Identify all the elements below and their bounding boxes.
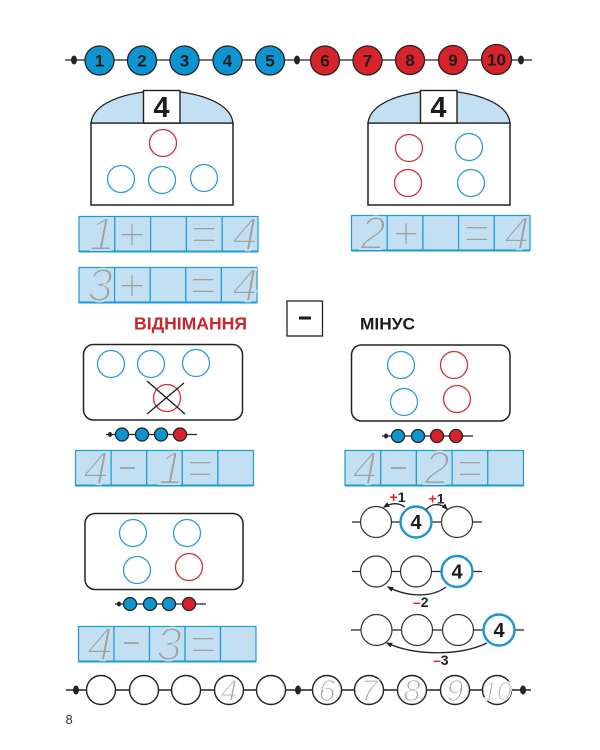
equation: 3 + = 4: 4 [232,259,258,311]
page number: 8 [66,712,73,727]
number line 1 to 10: 9 [448,51,458,70]
number line 1 to 10: 4 [223,52,233,70]
equation: 4 - 3 =: 3 [156,618,182,670]
panel: 2 blue, 2 red [352,345,510,421]
number diagram: 4 minus 3: –3 [433,652,449,668]
equation: 3 + = 4: = [190,259,216,311]
number line 1 to 10: 1 [95,52,104,70]
equation: 4 - 2 =: 2 [423,442,450,494]
bottom number line with traced digits: 7 [360,673,379,708]
equation: 2 + = 4: = [464,207,490,259]
equation: 2 + = 4: + [393,207,419,259]
equation: 2 + = 4: 2 [359,207,386,259]
panel: house with 1 red and 3 blue: 4 [153,92,170,124]
panel: house with 1 red and 3 blue [91,90,233,205]
equation: 4 - 1 =: = [187,442,213,494]
equation: 4 - 3 =: = [190,618,216,670]
number line 1 to 10 [65,44,532,75]
bottom number line with traced digits: 9 [446,673,464,708]
bottom number line with traced digits: 6 [318,673,336,708]
bead string: 3 blue, 1 red [106,428,197,441]
equation: 2 + = 4 [352,207,530,259]
equation: 1 + = 4: = [191,208,217,260]
equation: 3 + = 4: + [119,259,145,311]
number line 1 to 10: 2 [137,52,147,70]
bead string: 3 blue, 1 red, lower [115,598,206,610]
equation: 4 - 2 =: 4 [352,442,378,494]
equation: 4 - 1 =: 4 [83,442,109,494]
number line 1 to 10: 6 [320,52,330,70]
number diagram: 4 minus 2: 4 [451,562,463,584]
equation: 4 - 1 = [76,442,254,494]
number line 1 to 10: 10 [487,50,506,70]
number diagram: 4 with plus one each side: +1 [390,489,406,505]
equation: 3 + = 4 [79,259,258,311]
equation: 1 + = 4: 1 [89,208,115,260]
bottom number line with traced digits: 10 [483,676,512,706]
number diagram: 4 with plus one each side: +1 [428,490,445,506]
number line 1 to 10: 5 [265,52,275,70]
equation: 1 + = 4 [79,208,258,260]
bottom number line with traced digits: 8 [403,673,421,708]
bottom number line with traced digits [66,673,531,708]
panel: 3 blue, 1 red [85,514,243,590]
equation: 4 - 3 =: 4 [87,618,113,670]
heading: minus: МІНУС [360,314,415,334]
equation: 4 - 3 = [78,618,256,670]
number diagram: 4 minus 2 [352,556,482,610]
number diagram: 4 with plus one each side: 4 [410,512,422,534]
number diagram: 4 with plus one each side [352,489,482,538]
heading: subtraction: ВІДНІМАННЯ [134,314,247,334]
number line 1 to 10: 8 [405,51,415,70]
bottom number line with traced digits: 4 [220,673,238,708]
equation: 4 - 1 =: 1 [158,442,184,494]
panel: house with 2 red and 2 blue: 4 [430,92,447,124]
number diagram: 4 minus 2: –2 [413,594,429,610]
equation: 1 + = 4: 4 [232,208,258,260]
number line 1 to 10: 7 [363,52,372,70]
equation: 4 - 2 =: = [457,442,483,494]
equation: 1 + = 4: + [119,208,145,260]
number diagram: 4 minus 3: 4 [493,620,505,642]
number diagram: 4 minus 3 [351,614,524,668]
minus sign box [287,301,322,336]
equation: 4 - 2 = [345,442,524,494]
panel: house with 2 red and 2 blue [368,90,510,205]
number line 1 to 10: 3 [180,52,189,70]
panel: 3 blue, 1 red crossed out [84,344,242,420]
bead string: 2 blue, 2 red [382,430,473,442]
equation: 3 + = 4: 3 [87,259,113,311]
equation: 2 + = 4: 4 [504,207,530,259]
